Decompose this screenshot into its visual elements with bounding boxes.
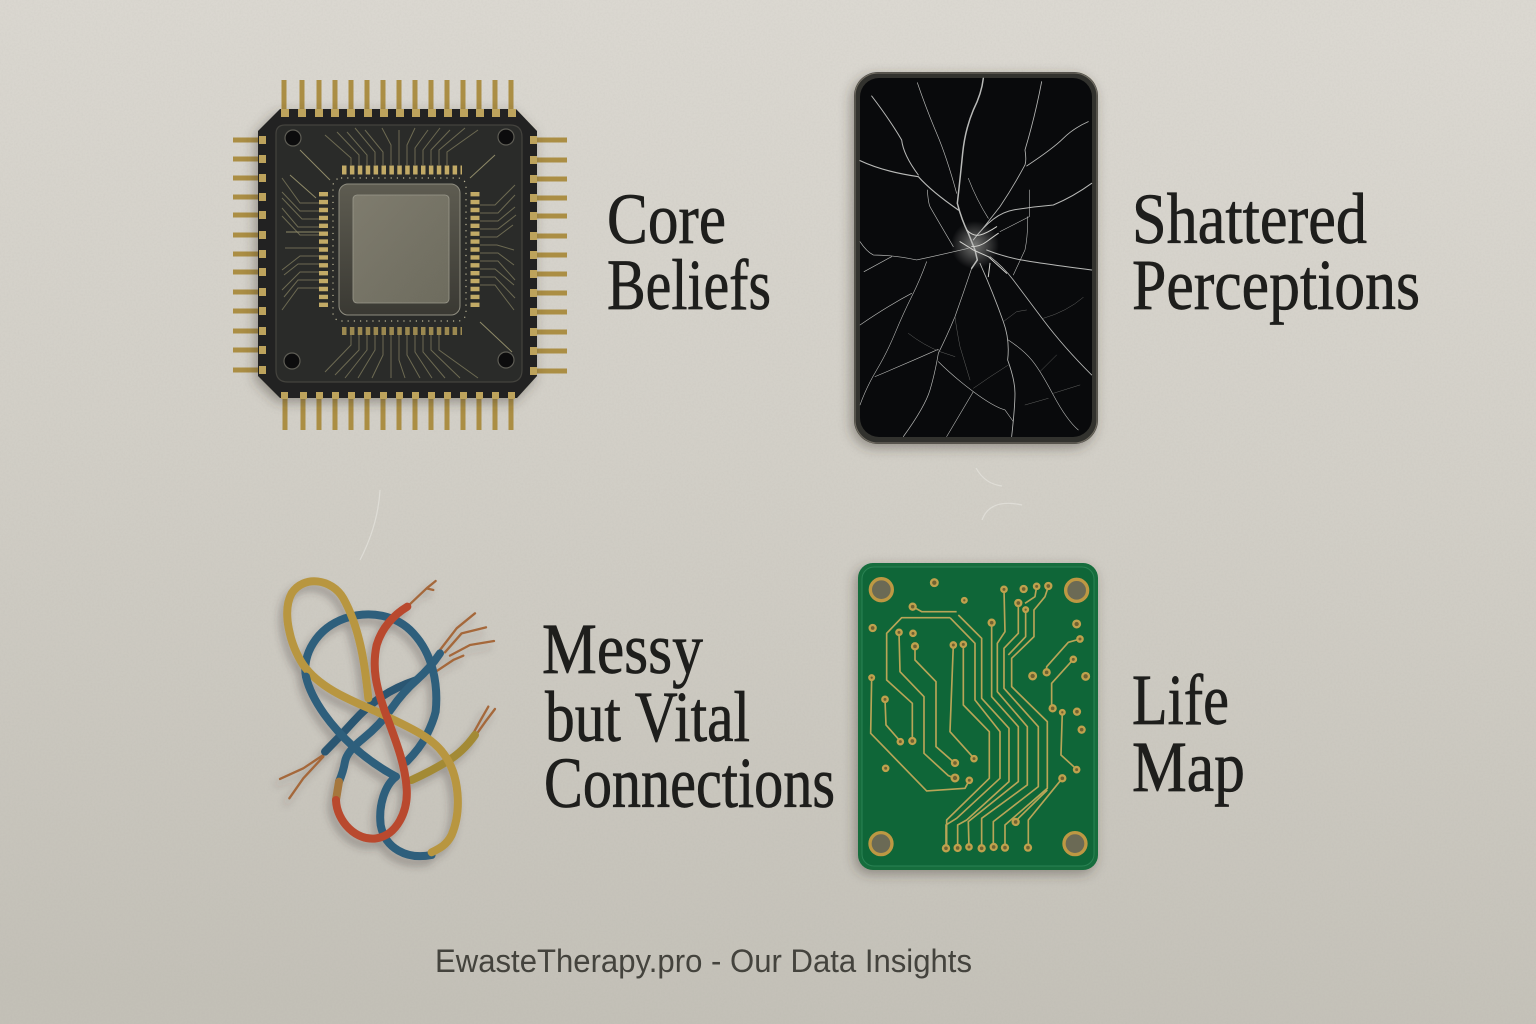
board traces — [871, 587, 1080, 848]
heading: Messy but Vital Connections: Connections — [544, 743, 835, 823]
heading: Core Beliefs — [607, 179, 771, 325]
footer credit: EwasteTherapy.pro - Our Data Insights — [435, 943, 972, 979]
blue wire: diagonal — [339, 653, 440, 782]
heading: Messy but Vital Connections: but Vital — [545, 677, 750, 757]
chip dotted ring — [333, 178, 466, 321]
blue wire: bottom loop — [380, 777, 432, 856]
heading: Shattered Perceptions — [1132, 179, 1420, 325]
heading: Shattered Perceptions: Shattered — [1132, 179, 1367, 259]
icon: green circuit board — [858, 563, 1098, 870]
board corner holes — [870, 579, 1088, 855]
chip inner lid — [353, 195, 449, 303]
wire tips: copper strands — [280, 581, 495, 798]
red wire — [336, 607, 407, 839]
chip pins — [233, 80, 567, 430]
board solder pads — [869, 579, 1089, 851]
chip mounting holes — [284, 129, 514, 369]
board contents — [869, 579, 1089, 855]
chip inner gold contacts — [324, 170, 475, 331]
board body — [858, 563, 1098, 870]
heading: Life Map — [1132, 660, 1245, 807]
chip lid — [339, 184, 460, 315]
phone cracks — [860, 78, 1092, 437]
phone screen — [860, 78, 1092, 437]
phone body — [854, 72, 1098, 444]
brown transition segment — [336, 782, 339, 800]
icon: microchip — [233, 80, 567, 430]
heading: Messy but Vital Connections — [542, 609, 835, 823]
heading: Core Beliefs: Core — [607, 179, 726, 259]
heading: Shattered Perceptions: Perceptions — [1132, 245, 1420, 325]
heading: Messy but Vital Connections: Messy — [542, 609, 703, 689]
blue wire: big loop — [305, 614, 436, 762]
heading: Core Beliefs: Beliefs — [607, 245, 771, 325]
gold wire: loop — [287, 581, 458, 852]
chip body — [258, 109, 537, 398]
chip traces — [282, 128, 516, 378]
gold wire end segment — [412, 735, 475, 780]
heading: Life Map: Life — [1132, 660, 1229, 740]
blue strand to left tip — [325, 680, 417, 752]
blue wire: crossing arc — [306, 677, 396, 777]
chip pads — [259, 109, 537, 399]
phone crack glow — [951, 221, 999, 269]
icon: tangled wires — [280, 581, 495, 856]
icon: shattered phone — [854, 72, 1098, 444]
heading: Life Map: Map — [1132, 727, 1245, 807]
